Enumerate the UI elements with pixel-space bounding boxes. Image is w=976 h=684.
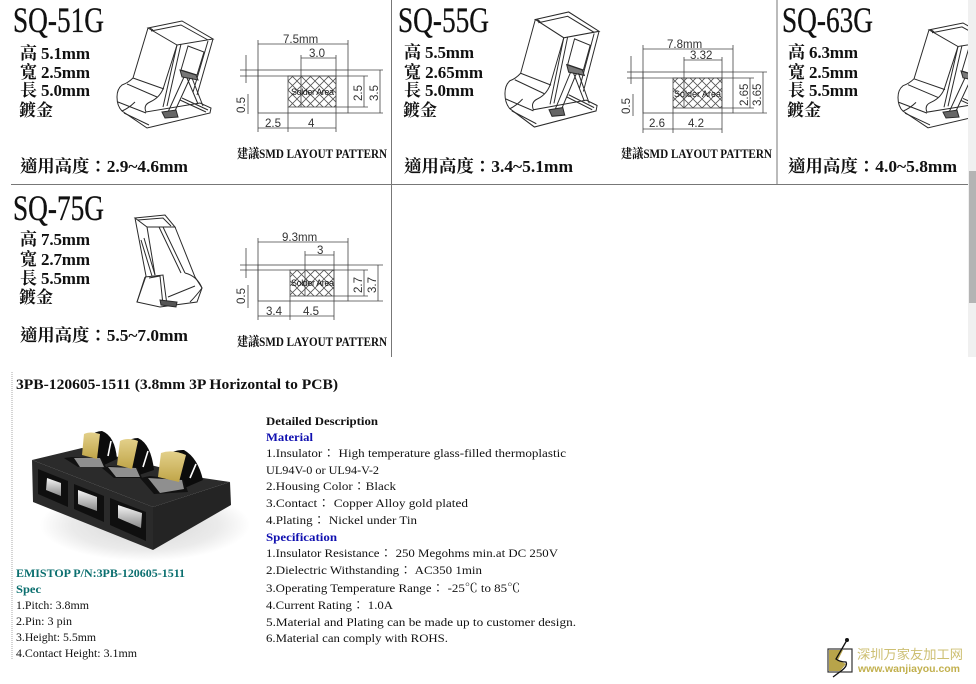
panel: SQ-51G (13, 0, 388, 176)
title: SQ-63G: SQ-63G (782, 0, 873, 40)
layout pattern caption: SQ-55G: 建議SMD LAYOUT PATTERN (621, 146, 773, 161)
detailed description text: 1.Insulator Resistance： 250 Megohms min.at DC 250V (266, 546, 558, 560)
watermark url: www.wanjiayou.com (857, 663, 960, 675)
detailed description text: 2.Housing Color：Black (266, 479, 396, 493)
SMD layout diagram: SQ-51G (236, 34, 383, 132)
dimensions list: SQ-75G: 鍍金 (19, 287, 53, 307)
title: SQ-55G: SQ-55G (398, 0, 489, 40)
detailed description text: 3.Contact： Copper Alloy gold plated (266, 496, 468, 510)
dimensions list: SQ-63G (787, 42, 858, 120)
detailed description text: Detailed Description (266, 414, 378, 428)
part number and spec list: EMISTOP P/N:3PB-120605-1511 (16, 566, 185, 580)
SMD layout diagram: SQ-55G: 4.2 (688, 118, 704, 130)
part number and spec list: 3.Height: 5.5mm (16, 630, 97, 644)
dimensions list: SQ-51G: 長 5.0mm (20, 81, 90, 100)
connector drawing: SQ-51G (117, 21, 213, 128)
detailed description text: 4.Current Rating： 1.0A (266, 598, 393, 612)
detailed description text: 2.Dielectric Withstanding： AC350 1min (266, 563, 482, 577)
SMD layout diagram: SQ-75G: 4.5 (303, 306, 319, 318)
dimensions list: SQ-55G: 長 5.0mm (404, 81, 474, 100)
detailed description text: 3.Operating Temperature Range： -25℃ to 85℃ (266, 581, 520, 595)
detailed description text: 6.Material can comply with ROHS. (266, 631, 448, 645)
title: SQ-51G: SQ-51G (13, 0, 104, 40)
dimensions list: SQ-63G: 寬 2.5mm (788, 63, 858, 82)
applicable height: SQ-63G: 適用高度：4.0~5.8mm (788, 156, 957, 176)
dimensions list: SQ-63G: 鍍金 (787, 100, 821, 120)
SMD layout diagram: SQ-55G: 0.5 (621, 98, 633, 114)
product heading: 3PB-120605-1511 (3.8mm 3P Horizontal to PCB) (16, 377, 338, 393)
layout pattern caption: SQ-51G: 建議SMD LAYOUT PATTERN (237, 146, 388, 161)
SMD layout diagram: SQ-75G: 0.5 (236, 288, 248, 304)
part number and spec list: 4.Contact Height: 3.1mm (16, 646, 138, 660)
SMD layout diagram: SQ-51G: 4 (308, 118, 315, 130)
icon: logo square (828, 638, 852, 677)
SMD layout diagram: SQ-51G: Solder Area (291, 87, 334, 97)
applicable height: SQ-55G: 適用高度：3.4~5.1mm (404, 156, 573, 176)
dimensions list: SQ-51G: 寬 2.5mm (20, 63, 90, 82)
dimensions list: SQ-51G (19, 43, 90, 120)
panel: SQ-55G (398, 0, 773, 176)
SMD layout diagram: SQ-75G: 3.4 (266, 306, 283, 318)
dimensions list: SQ-51G: 高 5.1mm (20, 43, 90, 63)
detailed description text: 4.Plating： Nickel under Tin (266, 513, 417, 527)
SMD layout diagram: SQ-55G: 2.6 (649, 118, 665, 130)
product photo: 3P battery connector (32, 431, 250, 561)
SMD layout diagram: SQ-75G: 3.7 (367, 277, 379, 293)
SMD layout diagram: SQ-75G: 9.3mm (282, 232, 317, 244)
connector drawing: SQ-55G (505, 12, 599, 127)
title: SQ-75G: SQ-75G (13, 188, 104, 228)
detailed description text: 5.Material and Plating can be made up to customer design. (266, 615, 576, 629)
dimensions list: SQ-75G (19, 229, 90, 307)
SMD layout diagram: SQ-75G: 2.7 (353, 277, 365, 293)
SMD layout diagram: SQ-55G (621, 39, 767, 133)
dimensions list: SQ-75G: 寬 2.7mm (20, 250, 90, 269)
SMD layout diagram: SQ-51G: 0.5 (236, 97, 248, 113)
dimensions list: SQ-75G: 高 7.5mm (20, 229, 90, 249)
SMD layout diagram: SQ-51G: 7.5mm (283, 34, 318, 46)
dimensions list: SQ-51G: 鍍金 (19, 100, 53, 120)
watermark site name: 深圳万家友加工网 (857, 647, 963, 662)
contact loops and plates (64, 431, 203, 494)
SMD layout diagram: SQ-51G: 3.0 (309, 48, 325, 60)
detailed description text (266, 414, 576, 645)
detailed description text: UL94V-0 or UL94-V-2 (266, 463, 379, 477)
scrollbar (968, 0, 976, 357)
detailed description text: Material (266, 430, 314, 444)
connector drawing: SQ-75G (135, 215, 202, 307)
watermark logo (828, 638, 963, 677)
dimensions list: SQ-63G: 長 5.5mm (788, 81, 858, 100)
applicable height: SQ-51G: 適用高度：2.9~4.6mm (20, 156, 188, 176)
dimensions list: SQ-75G: 長 5.5mm (20, 269, 90, 288)
dimensions list: SQ-55G: 高 5.5mm (404, 42, 474, 62)
SMD layout diagram: SQ-51G: 2.5 (265, 118, 281, 130)
panel: SQ-75G (13, 188, 388, 349)
detailed description text: Specification (266, 530, 337, 544)
dimensions list: SQ-55G: 鍍金 (403, 100, 437, 120)
SMD layout diagram: SQ-51G: 2.5 (353, 85, 365, 101)
dimensions list: SQ-55G (403, 42, 483, 120)
part number and spec list (16, 566, 185, 660)
front windows (38, 469, 146, 541)
panel: SQ-63G (784, 8, 968, 174)
SMD layout diagram: SQ-75G: Solder Area (291, 278, 334, 288)
SMD layout diagram: SQ-75G (236, 232, 383, 320)
dimensions list: SQ-63G: 高 6.3mm (788, 42, 858, 62)
part number and spec list: 2.Pin: 3 pin (16, 614, 72, 628)
part number and spec list: 1.Pitch: 3.8mm (16, 598, 90, 612)
applicable height: SQ-75G: 適用高度：5.5~7.0mm (20, 325, 188, 345)
SMD layout diagram: SQ-55G: 3.65 (752, 84, 764, 106)
SMD layout diagram: SQ-51G: 3.5 (369, 85, 381, 101)
detailed description text: 1.Insulator： High temperature glass-filled thermoplastic (266, 446, 566, 460)
SMD layout diagram: SQ-55G: 3.32 (690, 50, 712, 62)
SMD layout diagram: SQ-55G: 7.8mm (667, 39, 702, 51)
table grid lines (11, 0, 968, 357)
connector drawing: SQ-63G (cropped) (898, 23, 976, 128)
SMD layout diagram: SQ-75G: 3 (317, 245, 323, 257)
layout pattern caption: SQ-75G: 建議SMD LAYOUT PATTERN (237, 334, 388, 349)
SMD layout diagram: SQ-55G: Solder Area (674, 89, 721, 99)
part number and spec list: Spec (16, 582, 42, 596)
SMD layout diagram: SQ-55G: 2.65 (739, 84, 751, 106)
dotted left rule (11, 372, 13, 660)
dimensions list: SQ-55G: 寬 2.65mm (404, 63, 483, 82)
